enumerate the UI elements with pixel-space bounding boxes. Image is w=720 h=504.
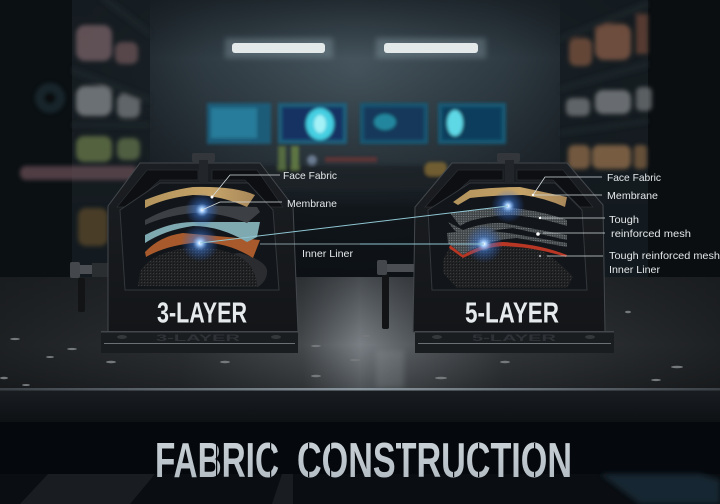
layer: red liner [449,242,567,258]
callout labels: Membrane [287,198,337,210]
callout labels: Tough reinforced mesh [609,250,720,262]
side handle [377,260,414,329]
layer: mesh 1 [450,207,567,226]
clamp window [120,183,279,290]
base plate: 5-LAYER [472,333,557,343]
callout leader lines [202,175,360,244]
base plate [415,331,614,353]
label: 5-LAYER: 5-LAYER [465,298,559,330]
leader dots [532,194,541,257]
ceiling lights [225,38,486,58]
left shelves with rolls [0,0,150,290]
callout labels: Membrane [607,190,658,202]
under-table dark band [0,422,720,504]
background: workshop wall [0,0,720,290]
stencil bridges [216,443,535,477]
title [155,434,572,488]
side handle [70,262,108,312]
callout labels: Tough [609,214,639,226]
callout labels [283,170,354,260]
foam core [443,244,573,288]
callout labels: Inner Liner [302,248,354,260]
callout labels: reinforced mesh [611,228,691,240]
connector beams between clamps [200,206,508,244]
layer: mesh 3 [447,231,567,255]
clamp: 3-layer [70,153,360,353]
base plate [101,331,298,353]
callout labels: Face Fabric [607,172,661,184]
top slots [117,170,283,207]
callout labels: Face Fabric [283,170,337,182]
top slots [425,170,593,207]
clamp screw knob [497,153,520,184]
clamp screw knob [192,153,215,184]
wall screens [207,103,506,144]
table front edge [0,388,720,422]
clamp body [108,163,298,332]
title: FABRIC [155,434,279,488]
layer: face fabric [453,187,567,207]
layer: light blue [145,222,260,243]
distant bench items [210,146,447,190]
layer: inner liner [145,233,260,258]
layer: face fabric [145,187,255,208]
layer: dark membrane [145,205,260,225]
foam core [138,247,267,287]
clamp window [428,183,587,290]
glow points [181,193,219,262]
clamp: 5-layer [377,153,720,353]
clamp body [413,163,605,332]
layer: mesh 2 [448,222,567,240]
base plate: 3-LAYER [156,333,241,343]
right shelves with rolls [560,0,720,290]
workbench table top [0,277,720,422]
callout leader lines [533,177,605,256]
table rivets [0,311,683,386]
callout labels [607,172,720,276]
label: 3-LAYER: 3-LAYER [157,298,247,330]
title: CONSTRUCTION [297,434,572,488]
glow points [465,189,525,263]
callout labels: Inner Liner [609,264,661,276]
